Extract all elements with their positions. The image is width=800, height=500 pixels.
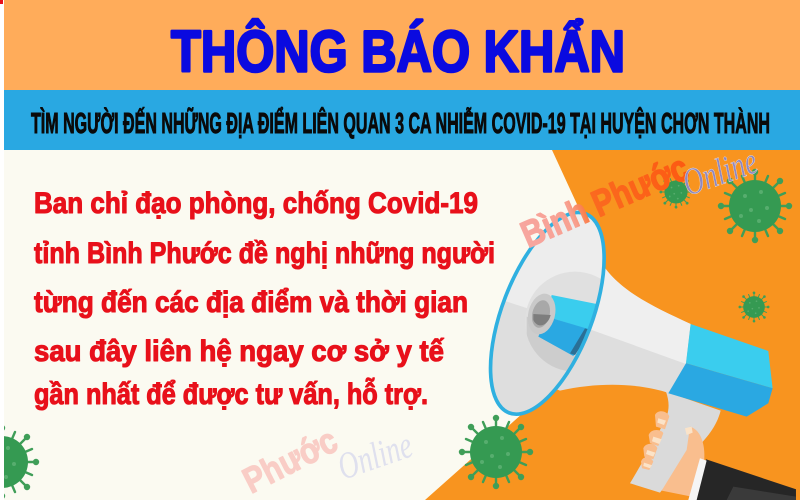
sleeve: [688, 458, 796, 500]
icon: virus behind watermark: [660, 176, 692, 208]
panel: subtitle band: [4, 90, 800, 150]
title: THÔNG BÁO KHẨN: [171, 20, 625, 84]
blue barrel: [668, 324, 773, 417]
body text block: tỉnh Bình Phước đề nghị những người: [34, 237, 495, 270]
body text block: Ban chỉ đạo phòng, chống Covid-19: [34, 187, 478, 220]
hand: [641, 411, 704, 497]
icon: virus bottom centre: [460, 416, 532, 488]
body text block: [34, 187, 495, 411]
panel: title header: [4, 0, 800, 90]
body text block: gần nhất để được tư vấn, hỗ trợ.: [34, 377, 428, 411]
watermark: bottom Phuoc: Phước: [236, 419, 344, 500]
body text block: từng đến các địa điểm và thời gian: [34, 286, 468, 319]
red corner mark: [0, 0, 3, 4]
icon: virus small right: [739, 292, 769, 322]
watermark: top Online: Online: [677, 140, 763, 205]
handle: [630, 392, 721, 493]
icon: megaphone: [488, 210, 796, 500]
megaphone body: [540, 260, 691, 393]
icon: virus top right: [719, 170, 791, 242]
background panel: [4, 150, 800, 500]
watermark: top Binh Phuoc: Bình Phước: [515, 147, 694, 255]
megaphone body highlight: [590, 260, 691, 364]
icon: virus bottom left: [0, 426, 38, 498]
bell: [488, 210, 606, 416]
orange diagonal background: [425, 150, 800, 500]
watermark: bottom Online: Online: [332, 424, 418, 489]
body text block: sau đây liên hệ ngay cơ sở y tế: [34, 335, 444, 368]
